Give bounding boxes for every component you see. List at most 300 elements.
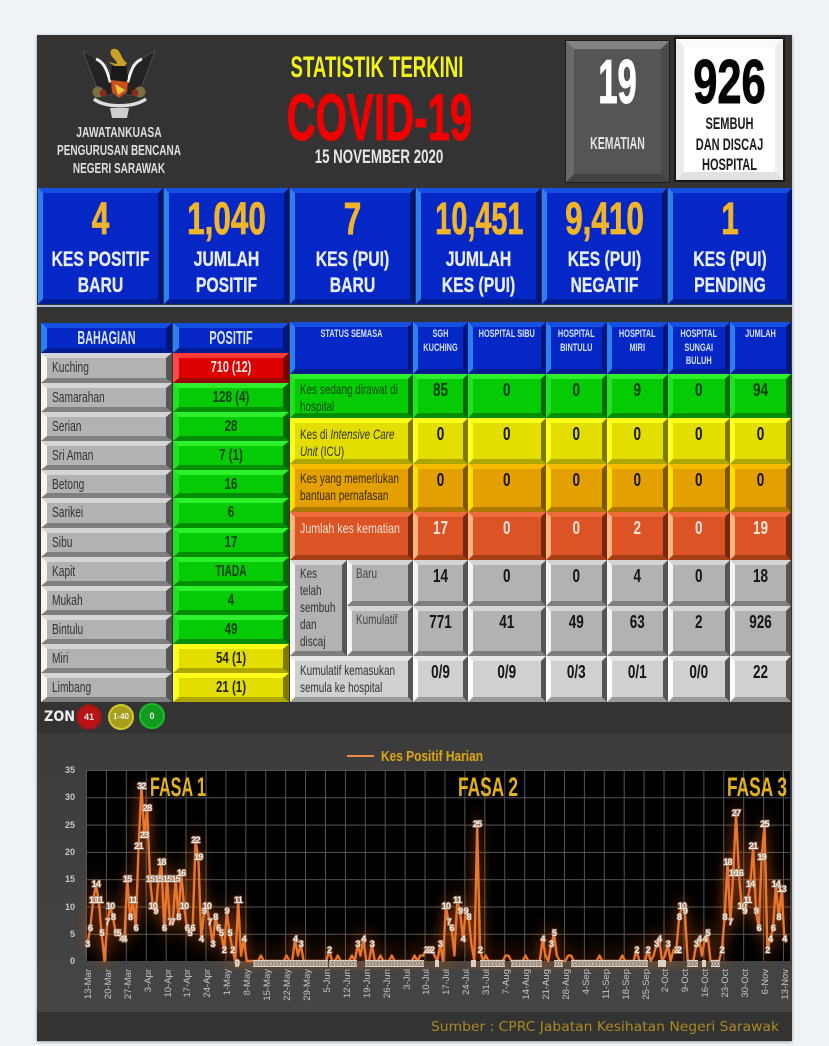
x axis date labels: 30-Oct xyxy=(740,969,751,998)
title: covid-19: COVID-19 xyxy=(287,80,472,154)
row: kes sedang dirawat: 0 xyxy=(503,380,510,400)
row: Betong: 16 xyxy=(225,476,237,493)
row: kes sedang dirawat: hospital xyxy=(300,398,334,414)
data labels: 5 xyxy=(552,928,557,938)
data labels xyxy=(85,781,787,968)
card: jumlah positif xyxy=(164,188,289,304)
row: kes kematian: Jumlah kes kematian xyxy=(300,520,400,536)
data labels: 2 xyxy=(478,945,483,955)
card: jumlah positif: POSITIF xyxy=(196,274,257,297)
data labels: 7 xyxy=(105,917,110,927)
data labels: 9 xyxy=(154,906,159,916)
table header row: KUCHING xyxy=(423,342,458,354)
zone yellow: 1-40 xyxy=(113,712,129,721)
data labels: 21 xyxy=(749,841,758,851)
data labels: 14 xyxy=(92,879,101,889)
row: Betong: Betong xyxy=(52,476,84,493)
card: jumlah kes pui: KES (PUI) xyxy=(442,274,515,297)
data labels: 3 xyxy=(356,939,361,949)
data labels: 2 xyxy=(634,945,639,955)
card: kes positif baru xyxy=(38,188,163,304)
data labels: 13 xyxy=(777,884,787,894)
x axis date labels: 5-Jun xyxy=(322,969,333,993)
row: Sarikei: Sarikei xyxy=(52,504,83,521)
row: bantuan pernafasan: 0 xyxy=(503,470,510,490)
data labels: 10 xyxy=(678,901,687,911)
data labels: 10 xyxy=(442,901,451,911)
card: kes pui baru: BARU xyxy=(330,274,375,297)
card: kes pui negatif: KES (PUI) xyxy=(568,248,641,271)
stat box: kematian: KEMATIAN xyxy=(590,133,645,153)
data labels: 16 xyxy=(177,868,186,878)
zero value labels along baseline: 0000000000 xyxy=(329,961,357,968)
data labels: 11 xyxy=(89,895,98,905)
row: ICU: 0 xyxy=(695,424,702,444)
row: baru xyxy=(347,560,791,606)
data labels: 3 xyxy=(210,939,215,949)
data labels: 2 xyxy=(327,945,332,955)
data labels: 4 xyxy=(461,934,466,944)
data labels: 8 xyxy=(128,912,133,922)
card: kes positif baru: KES POSITIF xyxy=(51,248,150,271)
row: Samarahan xyxy=(41,383,289,412)
data labels: 4 xyxy=(242,934,247,944)
row: Betong xyxy=(41,470,289,498)
row: Miri: 54 (1) xyxy=(216,650,246,667)
row: baru: 14 xyxy=(433,566,448,586)
card: kes pui pending: KES (PUI) xyxy=(693,248,767,271)
data labels: 3 xyxy=(438,939,443,949)
heading: fasa 1: FASA 1 xyxy=(150,772,206,802)
data labels: 19 xyxy=(194,852,203,862)
zero value labels along baseline: 00000000000 xyxy=(511,961,542,968)
row: Samarahan: Samarahan xyxy=(52,389,105,406)
icon: Sarawak state emblem xyxy=(82,48,156,118)
x axis date labels: 13-Nov xyxy=(780,969,791,1000)
row: baru: 4 xyxy=(633,566,641,586)
y axis labels: 5 xyxy=(70,929,75,939)
row: kemasukan semula: 0/9 xyxy=(497,662,516,682)
row: Sri Aman: Sri Aman xyxy=(52,447,93,464)
date: 15 NOVEMBER 2020 xyxy=(315,147,443,168)
row: bantuan pernafasan: bantuan pernafasan xyxy=(300,486,388,502)
x axis date labels: 16-Oct xyxy=(700,969,711,998)
table header row: BINTULU xyxy=(560,342,592,354)
table header: POSITIF xyxy=(209,328,253,348)
row: Sibu: 17 xyxy=(225,534,237,551)
zero value labels along baseline xyxy=(235,960,720,968)
x axis date labels: 8-May xyxy=(242,969,253,995)
chart legend: Kes Positif Harian xyxy=(381,748,483,765)
data labels: 9 xyxy=(225,906,230,916)
data labels: 5 xyxy=(114,928,119,938)
y axis labels xyxy=(65,765,75,966)
data labels: 18 xyxy=(723,857,732,867)
row: Serian: Serian xyxy=(52,418,81,435)
row: ICU: Kes di Intensive Care xyxy=(300,426,394,442)
data labels: 4 xyxy=(361,934,366,944)
card: kes pui baru: KES (PUI) xyxy=(316,248,389,271)
zone red xyxy=(76,704,102,730)
row: kes sedang dirawat: 0 xyxy=(572,380,580,400)
stat cards row xyxy=(38,188,792,304)
organisation name: PENGURUSAN BENCANA xyxy=(57,143,181,159)
x axis date labels: 17-Apr xyxy=(182,969,193,998)
data labels: 4 xyxy=(703,934,708,944)
data labels: 27 xyxy=(732,808,741,818)
row: kemasukan semula: semula ke hospital xyxy=(300,678,382,694)
y axis labels: 15 xyxy=(65,874,75,884)
x axis date labels: 25-Sep xyxy=(641,969,652,1000)
table header: BAHAGIAN xyxy=(77,328,136,348)
row: Miri: Miri xyxy=(52,650,68,667)
card: kes pui negatif: NEGATIF xyxy=(571,274,638,297)
data labels: 6 xyxy=(191,923,196,933)
row: Sibu xyxy=(41,528,289,557)
row: bantuan pernafasan: 0 xyxy=(633,470,641,490)
data labels: 6 xyxy=(771,923,776,933)
table header row: HOSPITAL xyxy=(680,328,717,340)
row: kemasukan semula: 0/1 xyxy=(628,662,647,682)
data labels: 8 xyxy=(777,912,782,922)
data labels: 25 xyxy=(473,819,482,829)
row: baru: 0 xyxy=(572,566,580,586)
data labels: 22 xyxy=(191,835,200,845)
row: Limbang: 21 (1) xyxy=(216,679,246,696)
card: kes pui baru xyxy=(290,188,415,304)
row group: kes telah sembuh label: dan xyxy=(300,616,317,632)
row: kumulatif: 63 xyxy=(630,612,645,632)
data labels: 10 xyxy=(106,901,115,911)
data labels: 25 xyxy=(760,819,769,829)
data labels: 2 xyxy=(230,945,235,955)
row: ICU: 0 xyxy=(437,424,444,444)
data labels: 15 xyxy=(154,874,163,884)
row: Serian xyxy=(41,412,289,441)
data labels: 9 xyxy=(754,906,759,916)
row: Bintulu xyxy=(41,615,289,644)
data labels: 11 xyxy=(453,895,462,905)
card: kes pui pending: PENDING xyxy=(694,274,766,297)
zone green xyxy=(139,703,165,729)
zero value labels along baseline: 0000 xyxy=(687,961,698,968)
row: kes kematian: 19 xyxy=(753,518,768,538)
daily positive cases line xyxy=(87,786,784,961)
row group: kes telah sembuh label: discaj xyxy=(300,633,325,649)
data labels: 4 xyxy=(697,934,702,944)
data labels: 7 xyxy=(208,917,213,927)
card: jumlah kes pui: JUMLAH xyxy=(446,248,511,271)
row: Sibu: Sibu xyxy=(52,534,72,551)
x axis date labels: 29-May xyxy=(302,969,313,1001)
row: ICU: 0 xyxy=(572,424,580,444)
data labels: 5 xyxy=(99,928,104,938)
x axis date labels: 20-Mar xyxy=(103,969,114,999)
data labels: 11 xyxy=(129,895,138,905)
data labels: 3 xyxy=(694,939,699,949)
row: kes sedang dirawat: Kes sedang dirawat di xyxy=(300,381,398,397)
row: Sri Aman: 7 (1) xyxy=(219,447,243,464)
row: Mukah: Mukah xyxy=(52,592,83,609)
row: Miri xyxy=(41,644,289,673)
row: kes kematian: 17 xyxy=(433,518,448,538)
stat box: kematian: 19 xyxy=(598,48,637,117)
row: kemasukan semula: Kumulatif kemasukan xyxy=(300,662,395,678)
data labels: 4 xyxy=(122,934,127,944)
data labels: 2 xyxy=(674,945,679,955)
chart panel: kes positif harian xyxy=(37,733,792,1012)
data labels: 14 xyxy=(746,879,755,889)
x axis date labels: 19-Jun xyxy=(362,969,373,998)
row: Kuching: Kuching xyxy=(52,359,89,376)
y axis labels: 25 xyxy=(65,820,75,830)
data labels: 5 xyxy=(219,928,224,938)
data labels: 6 xyxy=(216,923,221,933)
data labels: 6 xyxy=(88,923,93,933)
data labels: 18 xyxy=(157,857,166,867)
data labels: 2 xyxy=(646,945,651,955)
zone red: 41 xyxy=(84,712,94,722)
data labels: 19 xyxy=(757,852,767,862)
table: status semasa xyxy=(290,322,791,702)
plot area xyxy=(86,770,790,961)
row: kes kematian: 0 xyxy=(572,518,580,538)
row: ICU: Unit (ICU) xyxy=(300,442,344,458)
data labels: 9 xyxy=(464,906,469,916)
table header row: SUNGAI xyxy=(684,342,713,354)
x axis date labels: 1-May xyxy=(222,969,233,995)
row: Kapit xyxy=(41,557,289,586)
data labels: 3 xyxy=(299,939,304,949)
y axis labels: 0 xyxy=(70,956,75,966)
data labels: 9 xyxy=(202,906,207,916)
row: Mukah: 4 xyxy=(228,592,234,609)
row group: kes telah sembuh label: sembuh xyxy=(300,599,335,615)
x axis date labels: 28-Aug xyxy=(561,969,572,1000)
data labels: 4 xyxy=(782,934,787,944)
data labels: 23 xyxy=(140,830,149,840)
card: kes positif baru: BARU xyxy=(78,274,123,297)
row: kes sedang dirawat: 0 xyxy=(695,380,702,400)
row: baru: 0 xyxy=(503,566,510,586)
zero value labels along baseline: 000000000000000000000000000 xyxy=(571,961,648,968)
data labels: 9 xyxy=(742,906,747,916)
zero value labels along baseline: 00000000000000000000 xyxy=(365,961,424,968)
card: jumlah positif: JUMLAH xyxy=(194,248,259,271)
row: kemasukan semula xyxy=(290,656,791,702)
x axis date labels: 3-Apr xyxy=(143,969,154,992)
data labels: 6 xyxy=(757,923,762,933)
x axis date labels: 31-Jul xyxy=(481,969,492,995)
row: baru: 18 xyxy=(753,566,768,586)
y axis labels: 30 xyxy=(65,792,75,802)
row: kumulatif xyxy=(347,606,791,656)
data labels: 6 xyxy=(185,923,190,933)
zone legend xyxy=(44,703,165,730)
row: Sarikei: 6 xyxy=(228,504,234,521)
organisation name: NEGERI SARAWAK xyxy=(73,161,165,177)
x axis date labels: 7-Aug xyxy=(501,969,512,994)
zero value labels along baseline: 000 xyxy=(554,961,563,968)
row: kumulatif: 41 xyxy=(499,612,514,632)
x axis date labels: 4-Sep xyxy=(581,969,592,994)
data labels: 5 xyxy=(228,928,233,938)
row: kumulatif: 2 xyxy=(695,612,702,632)
data labels: 4 xyxy=(657,934,662,944)
data labels: 2 xyxy=(765,945,770,955)
row: kes kematian xyxy=(290,512,791,560)
row: Bintulu: 49 xyxy=(225,621,237,638)
data labels: 0 xyxy=(235,958,240,968)
x axis date labels: 2-Oct xyxy=(660,969,671,992)
row group: kes telah sembuh label: Kes xyxy=(300,565,317,581)
row: Limbang: Limbang xyxy=(52,679,91,696)
data labels: 7 xyxy=(728,917,733,927)
data labels: 3 xyxy=(549,939,554,949)
row: Kuching xyxy=(41,353,289,383)
stat box: sembuh: DAN DISCAJ xyxy=(696,136,763,154)
y axis labels: 10 xyxy=(65,902,75,912)
data labels: 3 xyxy=(654,939,659,949)
row: kes kematian: 0 xyxy=(695,518,702,538)
card: jumlah kes pui xyxy=(416,188,541,304)
row: Serian: 28 xyxy=(225,418,237,435)
heading: fasa 2: FASA 2 xyxy=(458,772,518,802)
stat box: sembuh: SEMBUH xyxy=(706,115,753,133)
data labels: 4 xyxy=(540,934,545,944)
data labels: 10 xyxy=(148,901,158,911)
table: bahagian positif xyxy=(41,323,289,702)
zero value labels along baseline: 00000000000000000000000000 xyxy=(253,961,328,968)
x axis date labels: 9-Oct xyxy=(680,969,691,992)
organisation name: JAWATANKUASA xyxy=(76,125,162,141)
row: baru: 0 xyxy=(695,566,702,586)
x axis date labels: 24-Apr xyxy=(202,969,213,998)
data labels: 11 xyxy=(743,895,752,905)
card: kes pui pending: 1 xyxy=(721,193,739,244)
row: kemasukan semula: 0/3 xyxy=(567,662,586,682)
zero value labels along baseline: 000 xyxy=(711,961,720,968)
data labels: 11 xyxy=(95,895,104,905)
data labels: 4 xyxy=(293,934,298,944)
data labels: 16 xyxy=(735,868,744,878)
row: bantuan pernafasan: 0 xyxy=(757,470,764,490)
data labels: 5 xyxy=(188,928,193,938)
data labels: 4 xyxy=(199,934,204,944)
row: kes sedang dirawat: 94 xyxy=(753,380,768,400)
row: kes sedang dirawat: 9 xyxy=(633,380,641,400)
data labels: 5 xyxy=(117,928,122,938)
data labels: 15 xyxy=(146,874,155,884)
table header row: JUMLAH xyxy=(745,328,776,340)
data labels: 10 xyxy=(180,901,189,911)
row: Samarahan: 128 (4) xyxy=(213,389,249,406)
data labels: 9 xyxy=(683,906,688,916)
data labels: 8 xyxy=(176,912,181,922)
y axis labels: 20 xyxy=(65,847,75,857)
row: bantuan pernafasan: 0 xyxy=(695,470,702,490)
y axis labels: 35 xyxy=(65,765,75,775)
data labels: 6 xyxy=(134,923,139,933)
organisation name xyxy=(57,125,181,177)
data labels: 21 xyxy=(134,841,144,851)
data labels: 15 xyxy=(171,874,181,884)
row: kemasukan semula: 0/0 xyxy=(689,662,708,682)
table header row: STATUS SEMASA xyxy=(321,328,382,340)
data labels: 9 xyxy=(458,906,463,916)
row: Sarikei xyxy=(41,498,289,528)
chart legend xyxy=(347,748,483,765)
data labels: 2 xyxy=(424,945,429,955)
row: Kapit: Kapit xyxy=(52,563,75,580)
row group: kes telah sembuh label xyxy=(290,560,347,656)
row: kumulatif: 49 xyxy=(569,612,584,632)
data labels: 8 xyxy=(111,912,116,922)
table header row: SGH xyxy=(433,328,448,340)
data labels: 7 xyxy=(447,917,452,927)
data labels: 3 xyxy=(666,939,671,949)
x axis date labels: 6-Nov xyxy=(760,969,771,994)
row: ICU: 0 xyxy=(503,424,510,444)
x axis date labels: 27-Mar xyxy=(123,969,134,999)
card: jumlah positif: 1,040 xyxy=(187,193,266,244)
data labels: 3 xyxy=(85,939,90,949)
row: Sri Aman xyxy=(41,441,289,470)
data labels: 8 xyxy=(723,912,728,922)
source footer: Sumber : CPRC Jabatan Kesihatan Negeri Sarawak xyxy=(431,1019,779,1035)
x axis date labels: 22-May xyxy=(282,969,293,1001)
row: bantuan pernafasan: 0 xyxy=(572,470,580,490)
zone yellow xyxy=(108,704,134,730)
row: kes kematian: 2 xyxy=(633,518,641,538)
row: kes kematian: 0 xyxy=(503,518,510,538)
data labels: 15 xyxy=(163,874,172,884)
x axis date labels: 11-Sep xyxy=(601,969,612,999)
row group: kes telah sembuh label: telah xyxy=(300,582,322,598)
data labels: 4 xyxy=(119,934,124,944)
row: bantuan pernafasan: Kes yang memerlukan xyxy=(300,470,399,486)
data labels: 28 xyxy=(143,803,152,813)
data labels: 6 xyxy=(162,923,167,933)
table header row: MIRI xyxy=(629,342,645,354)
data labels: 16 xyxy=(729,868,738,878)
row: Mukah xyxy=(41,586,289,615)
card: kes pui baru: 7 xyxy=(344,193,361,244)
row: ICU xyxy=(290,418,791,464)
row: kemasukan semula: 22 xyxy=(753,662,768,682)
x axis date labels xyxy=(83,969,791,1001)
title: statistik terkini: STATISTIK TERKINI xyxy=(291,51,463,84)
data labels: 7 xyxy=(168,917,173,927)
data labels: 2 xyxy=(677,945,682,955)
x axis date labels: 15-May xyxy=(262,969,273,1001)
data labels: 2 xyxy=(430,945,435,955)
card: kes positif baru: 4 xyxy=(92,193,109,244)
row: Kuching: 710 (12) xyxy=(211,359,251,376)
data labels: 8 xyxy=(213,912,218,922)
data labels: 4 xyxy=(768,934,773,944)
data labels: 15 xyxy=(123,874,132,884)
stat box: sembuh: 926 xyxy=(693,48,766,117)
table header row: HOSPITAL SIBU xyxy=(479,328,535,340)
x axis date labels: 24-Jul xyxy=(461,969,472,995)
row: Bintulu: Bintulu xyxy=(52,621,83,638)
data labels: 5 xyxy=(705,928,710,938)
row: kumulatif: 771 xyxy=(429,612,452,632)
data labels: 3 xyxy=(370,939,375,949)
zone green: 0 xyxy=(149,711,154,721)
x axis date labels: 17-Jul xyxy=(441,969,452,995)
